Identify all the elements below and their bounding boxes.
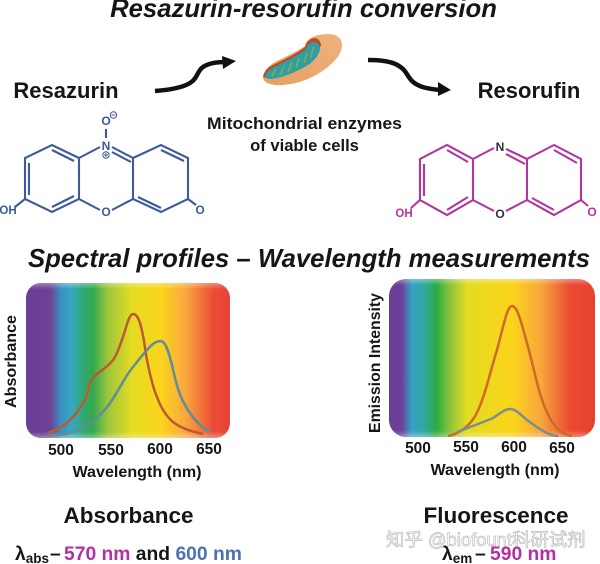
molecule: resorufin: O: [495, 207, 505, 221]
molecule: resazurin: N: [102, 139, 110, 153]
axis label: emission intensity: Emission Intensity: [367, 293, 384, 433]
label: Resazurin: Resazurin: [13, 78, 119, 103]
molecule: resorufin: O: [587, 205, 597, 219]
watermark: 知乎 @biofount科研试剂: [386, 529, 586, 550]
axis title: wavelength right: Wavelength (nm): [430, 461, 560, 479]
arrow: to Resorufin: [368, 60, 451, 96]
axis ticks: absorbance chart: 650: [196, 441, 222, 458]
label: mitochondrial enzymes: [207, 114, 402, 155]
heading: absorbance: Absorbance: [63, 503, 194, 528]
axis ticks: absorbance chart: 500: [48, 442, 74, 459]
axis ticks: fluorescence chart: 550: [453, 439, 479, 456]
label: mitochondrial enzymes: Mitochondrial enzymes: [207, 114, 402, 133]
curve: absorbance blue: [50, 341, 210, 435]
label: Resorufin: Resorufin: [478, 78, 580, 103]
molecule: resazurin: [0, 112, 205, 219]
molecule: resorufin: [395, 140, 597, 221]
axis title: wavelength left: Wavelength (nm): [72, 463, 202, 481]
axis ticks: fluorescence chart: 600: [501, 439, 527, 456]
axis ticks: absorbance chart: 600: [147, 441, 173, 458]
heading: spectral profiles: Spectral profiles – Wavelength measurements: [28, 245, 590, 273]
axis ticks: fluorescence chart: [405, 439, 575, 457]
chart: fluorescence spectrum: [389, 279, 595, 437]
axis ticks: fluorescence chart: 500: [405, 440, 431, 457]
curve: fluorescence red: [448, 306, 572, 436]
label: mitochondrial enzymes: of viable cells: [250, 136, 359, 155]
curve: absorbance red: [47, 314, 203, 434]
arrow: to mitochondrion: [155, 56, 236, 91]
icon: mitochondrion: [263, 34, 342, 85]
molecule: resorufin: OH: [395, 208, 413, 220]
molecule: resorufin: N: [496, 140, 504, 154]
axis label: absorbance: Absorbance: [3, 315, 20, 408]
axis ticks: absorbance chart: [48, 441, 222, 459]
molecule: resazurin: O: [101, 114, 111, 128]
axis ticks: absorbance chart: 550: [98, 442, 124, 459]
heading: fluorescence: Fluorescence: [423, 503, 569, 528]
molecule: resazurin: O: [101, 205, 111, 219]
chart: absorbance spectrum: [26, 283, 230, 438]
molecule: resazurin: O: [195, 203, 205, 217]
axis ticks: fluorescence chart: 650: [549, 440, 575, 457]
curve: fluorescence blue: [457, 409, 558, 436]
